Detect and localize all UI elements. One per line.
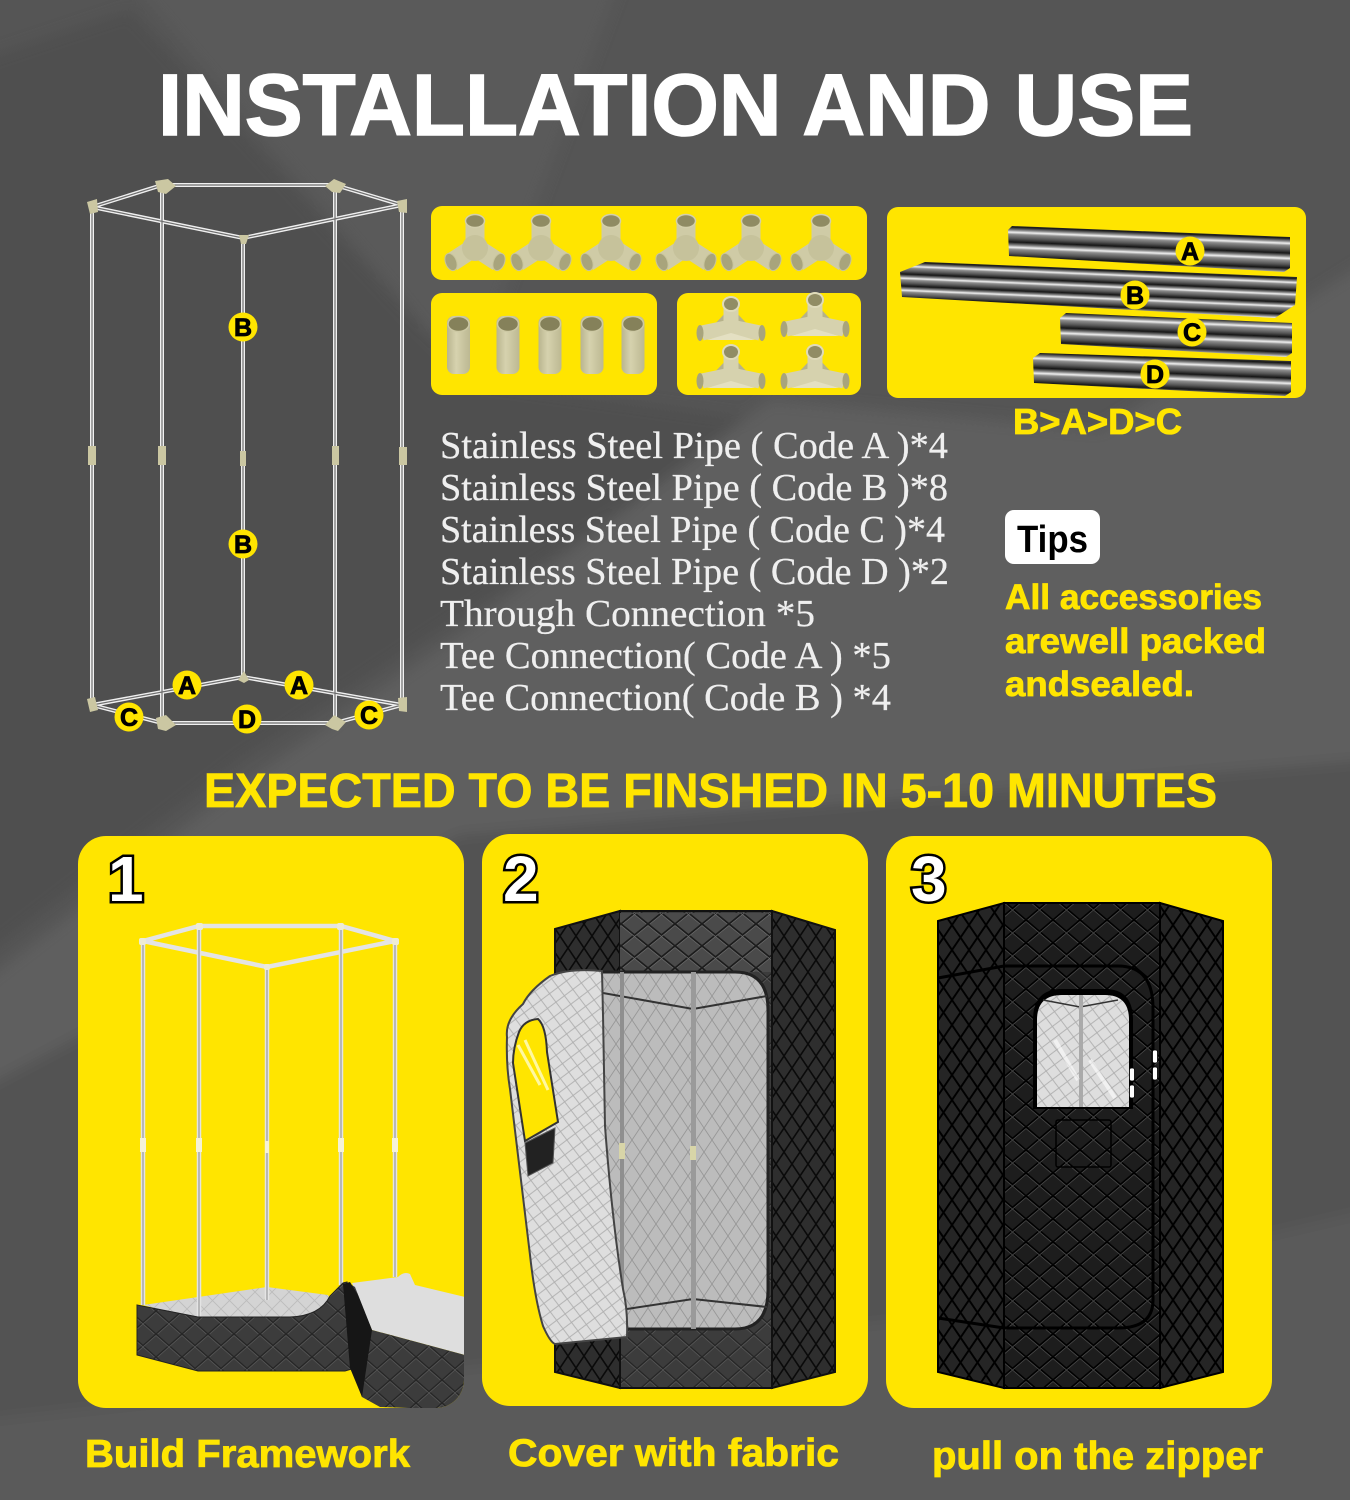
- panel: tee connectors code B: [677, 293, 861, 395]
- frame diagram with pipe code labels: [87, 179, 407, 734]
- parts list: Stainless Steel Pipe ( Code C )*4: [440, 509, 945, 551]
- parts list: Through Connection *5: [440, 593, 815, 635]
- tips text: [1005, 578, 1266, 704]
- zippers: [1130, 1050, 1158, 1098]
- window: [1033, 989, 1133, 1109]
- illustration: framework: [137, 923, 465, 1410]
- label A: [172, 670, 202, 700]
- pipe bundle D: D: [1146, 361, 1164, 389]
- label C: C: [360, 702, 378, 730]
- tips text: arewell packed: [1005, 622, 1266, 661]
- parts list: Tee Connection( Code B ) *4: [440, 677, 891, 719]
- label D: [232, 704, 262, 734]
- label C: [114, 702, 144, 732]
- pipe bundle C: [1060, 313, 1292, 357]
- label C: [354, 700, 384, 730]
- panel: step 2 cover with fabric: [482, 834, 868, 1406]
- label C: C: [120, 704, 138, 732]
- tips text: andsealed.: [1005, 665, 1194, 704]
- panel: tee connectors code A: [431, 206, 867, 280]
- pipe bundle B: B: [1126, 282, 1144, 310]
- illustration: closed tent: [938, 903, 1223, 1388]
- caption step 3: pull on the zipper: [932, 1435, 1263, 1478]
- label B: B: [234, 314, 252, 342]
- caption step 1: Build Framework: [85, 1433, 410, 1476]
- caption step 2: Cover with fabric: [508, 1432, 839, 1475]
- tent interior: [600, 972, 768, 1329]
- parts list: Stainless Steel Pipe ( Code D )*2: [440, 551, 949, 593]
- label B: B: [234, 531, 252, 559]
- label B: [228, 530, 258, 559]
- panel: pipe bundles: [887, 207, 1306, 398]
- parts list: Tee Connection( Code A ) *5: [440, 635, 891, 677]
- step number 2: 2: [503, 843, 539, 915]
- label B: [228, 312, 258, 342]
- parts list: Stainless Steel Pipe ( Code A )*4: [440, 425, 948, 467]
- label A: A: [290, 672, 308, 700]
- door flap: [507, 970, 627, 1344]
- panel: through connectors: [431, 293, 657, 395]
- label A: A: [178, 672, 196, 700]
- pipe bundle C: C: [1183, 319, 1201, 347]
- subtitle: EXPECTED TO BE FINSHED IN 5-10 MINUTES: [204, 765, 1217, 818]
- title: INSTALLATION AND USE: [158, 57, 1193, 154]
- label D: D: [238, 706, 256, 734]
- tips badge: [1005, 510, 1100, 564]
- tips text: All accessories: [1005, 578, 1262, 617]
- pipe bundle B: [900, 262, 1297, 318]
- panel: step 3 pull zipper: [886, 836, 1272, 1408]
- parts list: [440, 425, 949, 719]
- panel: step 1 build framework: [78, 836, 465, 1410]
- step number 1: 1: [108, 843, 144, 915]
- label A: [284, 670, 314, 700]
- parts list: Stainless Steel Pipe ( Code B )*8: [440, 467, 948, 509]
- illustration: open tent: [507, 911, 835, 1388]
- length order: B>A>D>C: [1013, 401, 1182, 442]
- step number 3: 3: [911, 843, 947, 915]
- tips badge: Tips: [1017, 519, 1088, 561]
- pocket: [1056, 1120, 1111, 1167]
- pipe bundle A: A: [1181, 238, 1199, 266]
- pipe bundle A: [1008, 226, 1290, 272]
- pipe bundle D: [1033, 353, 1291, 396]
